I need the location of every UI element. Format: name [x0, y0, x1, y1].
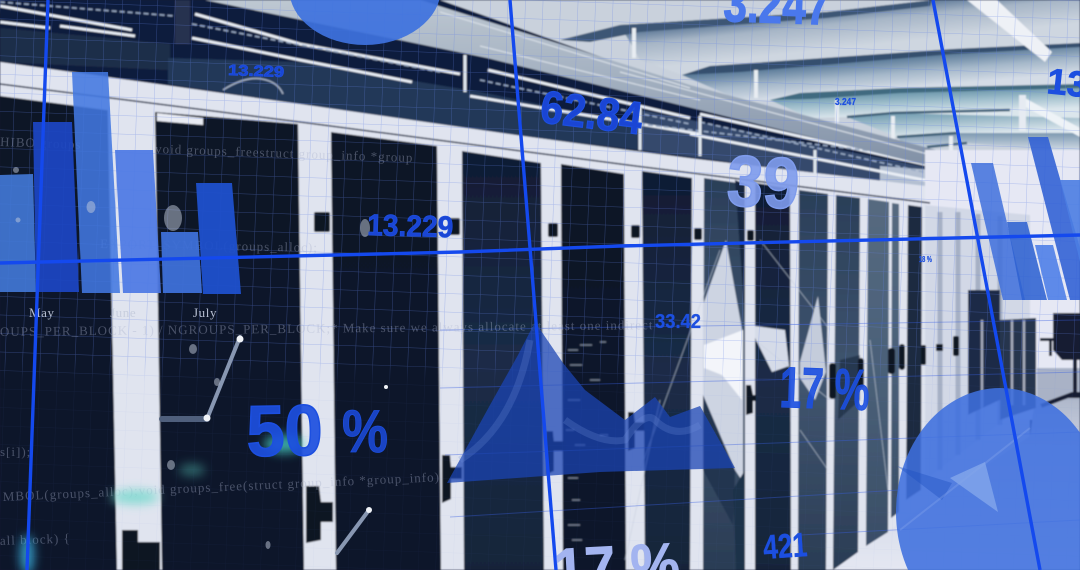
- glass reflections: [566, 180, 888, 570]
- pie chart: top: [289, 0, 441, 45]
- month labels: June: [110, 305, 136, 320]
- code text overlay: all block) {: [0, 531, 71, 548]
- door handles: [122, 212, 959, 570]
- number: small 13.229: 13.229: [228, 62, 284, 81]
- teal lens flare: [20, 435, 304, 570]
- overhead duct: [205, 0, 955, 172]
- number: tiny percent: 18 %: [919, 255, 932, 264]
- number: 50 %: 50: [246, 391, 323, 472]
- bar chart: far right: [971, 137, 1080, 300]
- floating numbers: [228, 0, 1080, 570]
- area chart: [447, 322, 735, 483]
- month labels: [29, 305, 217, 320]
- code text overlay: void groups_freestruct group_info *group: [155, 141, 414, 165]
- number: 421: 421: [762, 526, 808, 567]
- ceiling: [400, 0, 1080, 200]
- pie chart: lower right: [896, 388, 1080, 570]
- number: 17 %: 17 %: [779, 355, 871, 423]
- bokeh dots: [13, 167, 370, 549]
- number: 39: 39: [725, 141, 801, 225]
- number: 3.247 small: 3.247: [835, 97, 856, 108]
- rack doors: [0, 96, 922, 570]
- code text overlay: OUPS_PER_BLOCK - 1) / NGROUPS_PER_BLOCK;* Make sure we always allocate at least one indirect: [0, 317, 653, 339]
- rack top band shadow line: [0, 84, 930, 203]
- code text overlay: MBOL(groups_alloc);void groups_free(struct group_info *group_info): [2, 469, 440, 504]
- number: 33.42: 33.42: [655, 311, 701, 333]
- code text overlay: [0, 134, 653, 548]
- office chair: [1040, 313, 1080, 408]
- code text overlay: s[i]);: [0, 444, 31, 459]
- far room and floor: [830, 150, 1080, 570]
- number: 50 %: [246, 391, 388, 472]
- code text overlay: EXPORT_SYMBOL(groups_alloc);: [100, 236, 318, 255]
- month labels: May: [29, 305, 55, 320]
- number: 50 %: %: [342, 398, 388, 465]
- number: 13.229: 13.229: [367, 209, 454, 244]
- line chart strokes: [162, 336, 388, 553]
- code text overlay: HIBO groups: [0, 134, 82, 152]
- month labels: July: [193, 305, 217, 320]
- thin horizontal data lines: [440, 320, 1080, 535]
- number: 62.84: 62.84: [538, 80, 646, 144]
- dark area above racks with cable tray: [0, 0, 965, 195]
- bar chart: [0, 72, 241, 320]
